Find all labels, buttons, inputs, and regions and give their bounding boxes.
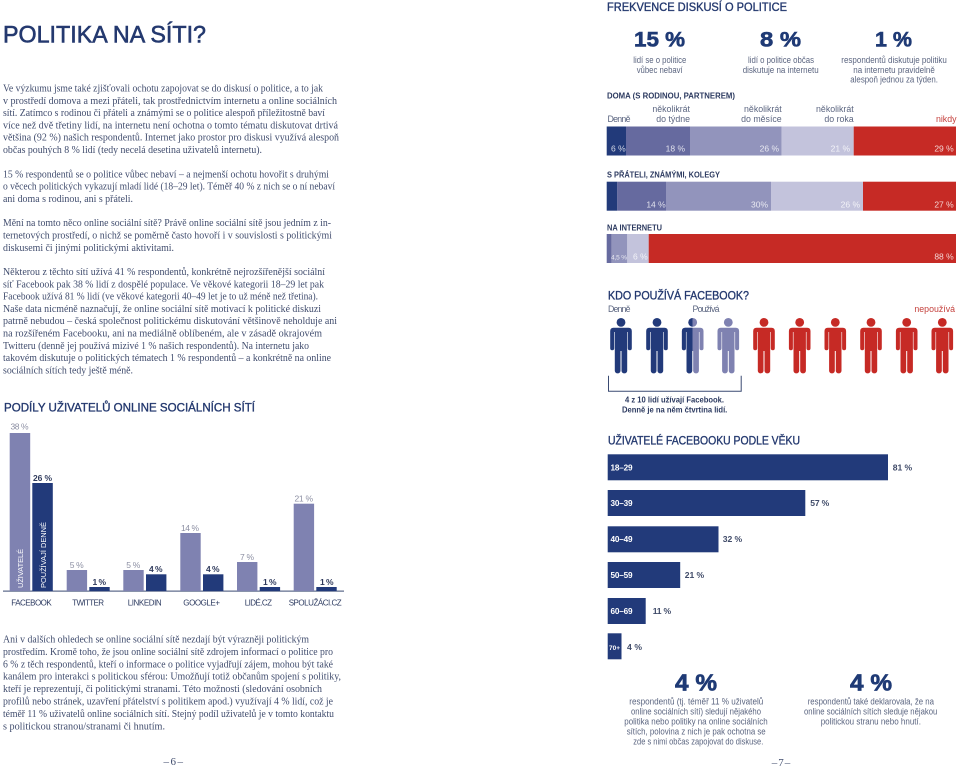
pictogram: Facebook users: Denně bbox=[608, 304, 631, 314]
stat: 4 percent follow parties: 4 % bbox=[850, 670, 892, 696]
text block: Facebook and Twitter usage: sociálních sítích tedy ještě méně. bbox=[3, 365, 133, 376]
stacked bar: at home: několikrát bbox=[652, 104, 691, 114]
stacked bar: with friends: S PŘÁTELI, ZNÁMÝMI, KOLEGY bbox=[607, 168, 720, 179]
text block: online social networks question: Mění na tomto něco online sociální sítě? Právě online sociální sítě jsou jedním z in- bbox=[3, 218, 332, 229]
stacked bar: at home: 26 % bbox=[760, 144, 779, 154]
text block: Facebook and Twitter usage: takovém diskutuje o politických tématech 1 % respondentů – a konkrétně na online bbox=[3, 353, 331, 364]
stat: 4 percent follow parties: respondentů také deklarovala, že na bbox=[808, 696, 934, 706]
stat: 8 percent: diskutuje na internetu bbox=[743, 65, 819, 75]
text block: other aspects: prostředím. Kromě toho, že jsou online sociální sítě zdrojem informací o politice pro bbox=[3, 647, 333, 658]
group: Facebook bbox=[10, 421, 53, 608]
stacked bar: with friends bbox=[607, 168, 956, 211]
text block: Facebook and Twitter usage: Facebook užívá 81 % lidí (ve věkové kategorii 40–49 let je to už méně než třetina). bbox=[3, 292, 318, 303]
text block: intro paragraph: většina (92 %) našich respondentů. Internet jako prostor pro diskusi využívá alespoň bbox=[3, 133, 340, 144]
stat: 4 percent follow politicians: politika nebo politiky na online sociálních bbox=[624, 716, 768, 726]
text block: other aspects: profilů nebo stránek, uzavření přátelství s politikem apod.) využívají 4 % lidí, což je bbox=[3, 696, 333, 708]
stacked bar: with friends: 30% bbox=[751, 199, 768, 209]
group: Facebook: POUŽÍVAJÍ DENNĚ bbox=[39, 522, 48, 588]
text block: Facebook and Twitter usage: Twitteru (denně jej používá mizivé 1 % našich respondentů). Na internetu jako bbox=[3, 341, 309, 352]
text block: Facebook and Twitter usage: na rozšířeném Facebooku, ani na mediálně oblíbeném, ale v zásadě okrajovém bbox=[3, 328, 322, 340]
text block: Facebook and Twitter usage: síť Facebook pak 38 % lidí z dospělé populace. Ve věkové kategorii 18–29 let pak bbox=[3, 279, 325, 290]
heading: who uses Facebook: KDO POUŽÍVÁ FACEBOOK? bbox=[608, 287, 749, 302]
title: POLITIKA NA SÍTI? bbox=[3, 21, 206, 48]
group: Spolužáci.cz: 1 % bbox=[320, 577, 334, 587]
stat: 4 percent follow politicians: 4 % bbox=[675, 670, 717, 696]
bar chart: Facebook users by age: 81 % bbox=[893, 462, 913, 472]
stacked bar: at home: do roka bbox=[824, 114, 854, 124]
stat: 1 percent: 1 % bbox=[875, 29, 912, 52]
group: Twitter: 5 % bbox=[70, 560, 84, 570]
group: Lidé.cz: 1 % bbox=[263, 577, 277, 587]
callout: 4 of 10 use Facebook bbox=[608, 376, 741, 414]
text block: Facebook and Twitter usage: Naše data nicméně naznačují, že online sociální sítě motivací k politické diskuzi bbox=[3, 304, 321, 315]
stat: 4 percent follow politicians bbox=[624, 670, 768, 746]
group: Twitter: 1 % bbox=[92, 577, 106, 587]
text block: intro paragraph: Ve výzkumu jsme také zjišťovali ochotu zapojovat se do diskusí o politice, a to jak bbox=[3, 84, 324, 94]
text block: online social networks question bbox=[3, 218, 332, 254]
text block: intro paragraph: občas pouhých 8 % lidí (tedy necelá desetina uživatelů internetu). bbox=[3, 145, 262, 156]
bar chart: Facebook users by age: 70+ bbox=[609, 645, 620, 652]
bar chart: Facebook users by age: 60–69 bbox=[610, 607, 633, 616]
stacked bar: at home: Denně bbox=[608, 114, 631, 124]
text block: Facebook and Twitter usage bbox=[3, 267, 337, 376]
text block: Facebook and Twitter usage: Některou z těchto sítí užívá 41 % respondentů, konkrétně nejrozšířenější sociální bbox=[3, 267, 325, 278]
group: LinkedIn bbox=[123, 560, 166, 608]
stat: 8 percent: 8 % bbox=[760, 29, 801, 52]
stat: 4 percent follow politicians: zde s nimi občas zapojovat do diskuse. bbox=[633, 736, 763, 746]
text block: intro paragraph: v prostředí domova a mezi přáteli, tak prostřednictvím internetu a online sociálních bbox=[3, 96, 338, 107]
group: Google+ bbox=[180, 523, 223, 608]
text block: young people: ani doma s rodinou, ani s přáteli. bbox=[3, 194, 133, 205]
stacked bar: at home: DOMA (S RODINOU, PARTNEREM) bbox=[607, 92, 735, 101]
stacked bar: at home: do týdne bbox=[656, 114, 690, 124]
bar chart: Facebook users by age: 21 % bbox=[685, 570, 705, 580]
bar chart: Facebook users by age: 30–39 bbox=[610, 499, 633, 508]
group: Lidé.cz: 7 % bbox=[240, 552, 254, 562]
text block: intro paragraph: sítí. Zatímco s rodinou či přáteli a známými se o politice alespoň příležitostně baví bbox=[3, 108, 325, 119]
heading: social network shares: PODÍLY UŽIVATELŮ ONLINE SOCIÁLNÍCH SÍTÍ bbox=[4, 400, 256, 415]
stacked bar: at home: několikrát bbox=[744, 104, 782, 114]
stat: 4 percent follow politicians: online sociálních sítí) sledují nějakého bbox=[631, 706, 761, 716]
bar chart: Facebook users by age: 18–29 bbox=[610, 463, 633, 472]
text block: intro paragraph bbox=[3, 84, 340, 156]
stacked bar: on the internet: NA INTERNETU bbox=[607, 223, 662, 232]
group: Lidé.cz: LIDÉ.CZ bbox=[245, 599, 272, 608]
text block: other aspects: kteří je reprezentují, či politickými stranami. Této možnosti (sledování osobních bbox=[3, 684, 323, 695]
callout: 4 of 10 use Facebook: Denně je na něm čtvrtina lidí. bbox=[622, 405, 727, 414]
stat: 15 percent: vůbec nebaví bbox=[637, 65, 683, 75]
stat: 4 percent follow politicians: sítích, polovina z nich je pak ochotna se bbox=[627, 726, 766, 736]
text block: intro paragraph: více než dvě třetiny lidí, na internetu není ochotna o tomto tématu diskutovat drtivá bbox=[3, 120, 338, 131]
stacked bar: on the internet: 88 % bbox=[934, 251, 954, 261]
bar chart: Facebook users by age bbox=[608, 454, 913, 659]
text block: other aspects: 6 % z těch respondentů, kteří o informace o politice vyjadřují zájem, mohou být také bbox=[3, 659, 333, 670]
stacked bar: on the internet: 6 % bbox=[633, 251, 648, 261]
stacked bar: with friends: 26 % bbox=[841, 199, 860, 209]
group: Google+: 14 % bbox=[181, 523, 199, 533]
text block: Facebook and Twitter usage: patrně nebudou – česká společnost politickému diskutování většinově neholduje ani bbox=[3, 316, 337, 327]
group: LinkedIn: 5 % bbox=[126, 560, 141, 570]
stacked bar: at home: 18 % bbox=[666, 144, 685, 154]
stat: 15 percent bbox=[633, 29, 686, 75]
group: Spolužáci.cz bbox=[289, 494, 342, 608]
stat: 8 percent: lidí o politice občas bbox=[748, 55, 815, 65]
group: Facebook: 26 % bbox=[33, 473, 52, 483]
bar chart: Facebook users by age: 57 % bbox=[810, 498, 830, 508]
stacked bar: at home: do měsíce bbox=[741, 114, 782, 124]
stat: 15 percent: lidí se o politice bbox=[633, 55, 686, 65]
group: Spolužáci.cz: 21 % bbox=[294, 494, 313, 504]
group: Twitter: TWITTER bbox=[72, 599, 104, 608]
group: Google+: GOOGLE+ bbox=[183, 599, 220, 608]
group: LinkedIn: 4 % bbox=[149, 564, 163, 574]
stacked bar: at home: 29 % bbox=[934, 144, 954, 154]
stat: 1 percent bbox=[841, 29, 947, 85]
text block: online social networks question: diskusemi či jinými politickými aktivitami. bbox=[3, 243, 174, 254]
stat: 4 percent follow parties: politickou stranu nebo hnutí. bbox=[821, 716, 921, 726]
stacked bar: at home: několikrát bbox=[816, 104, 854, 114]
stacked bar: at home: nikdy bbox=[936, 114, 957, 124]
callout: 4 of 10 use Facebook: 4 z 10 lidí užívají Facebook. bbox=[625, 395, 724, 404]
bar chart: Facebook users by age: 40–49 bbox=[610, 535, 633, 544]
text block: young people: 15 % respondentů se o politice vůbec nebaví – a nejmenší ochotu hovořit s druhými bbox=[3, 169, 329, 180]
stacked bar: at home: 6 % bbox=[611, 144, 626, 154]
bar chart: social network shares bbox=[3, 421, 344, 608]
stat: 1 percent: na internetu pravidelně bbox=[853, 65, 935, 75]
text block: other aspects: Ani v dalších ohledech se online sociální sítě nezdají být výrazněji politickým bbox=[3, 634, 309, 646]
stat: 4 percent follow politicians: respondentů (tj. téměř 11 % uživatelů bbox=[629, 696, 763, 706]
text block: other aspects: kanálem pro interakci s politickou sférou: Umožňují totiž občanům spojení s politiky, bbox=[3, 672, 341, 683]
bar chart: Facebook users by age: 50–59 bbox=[610, 571, 633, 580]
stat: 1 percent: respondentů diskutuje politiku bbox=[841, 55, 947, 65]
stacked bar: at home bbox=[607, 92, 957, 156]
text block: other aspects bbox=[3, 634, 341, 732]
stacked bar: at home: 21 % bbox=[831, 144, 850, 154]
bar chart: Facebook users by age: 4 % bbox=[627, 642, 642, 652]
page number 6: – 6 – bbox=[162, 756, 184, 768]
bar chart: Facebook users by age: 32 % bbox=[723, 534, 743, 544]
stat: 4 percent follow parties bbox=[804, 670, 937, 726]
stat: 4 percent follow parties: online sociálních sítích sleduje nějakou bbox=[804, 706, 937, 716]
pictogram: Facebook users bbox=[608, 304, 955, 373]
group: Facebook: UŽIVATELÉ bbox=[16, 549, 25, 588]
stacked bar: on the internet: 4,5 % bbox=[611, 254, 627, 261]
pictogram: Facebook users: Používá bbox=[692, 304, 720, 314]
bar chart: Facebook users by age: 11 % bbox=[653, 606, 672, 616]
group: Lidé.cz bbox=[237, 552, 280, 608]
stacked bar: on the internet bbox=[607, 223, 956, 263]
pictogram: Facebook users: nepoužívá bbox=[914, 304, 955, 314]
text block: young people bbox=[3, 169, 335, 205]
stacked bar: with friends: 14 % bbox=[646, 199, 666, 209]
heading: discussion frequency: FREKVENCE DISKUSÍ O POLITICE bbox=[607, 0, 787, 14]
group: Spolužáci.cz: SPOLUŽÁCI.CZ bbox=[289, 599, 342, 608]
heading: Facebook users by age: UŽIVATELÉ FACEBOOKU PODLE VĚKU bbox=[608, 432, 800, 447]
stat: 8 percent bbox=[743, 29, 819, 75]
stacked bar: with friends: 27 % bbox=[934, 199, 954, 209]
group: Facebook: FACEBOOK bbox=[11, 599, 52, 608]
group: LinkedIn: LINKEDIN bbox=[128, 599, 162, 608]
group: Google+: 4 % bbox=[206, 564, 220, 574]
text block: other aspects: s politickou stranou/stranami či hnutím. bbox=[3, 721, 165, 732]
text block: young people: o věcech politických vykazují mladí lidé (18–29 let). Téměř 40 % z nich se o ní nebaví bbox=[3, 182, 335, 193]
stat: 15 percent: 15 % bbox=[634, 29, 685, 52]
stat: 1 percent: alespoň jednou za týden. bbox=[850, 75, 938, 85]
text block: other aspects: téměř 11 % uživatelů online sociálních sítí. Stejný podíl uživatelů je v tomto kontaktu bbox=[3, 709, 335, 720]
group: Facebook: 38 % bbox=[10, 421, 29, 431]
group: Twitter bbox=[67, 560, 110, 608]
text block: online social networks question: ternetových prostředí, o nichž se poměrně často hovoří i v souvislosti s politickými bbox=[3, 230, 332, 241]
